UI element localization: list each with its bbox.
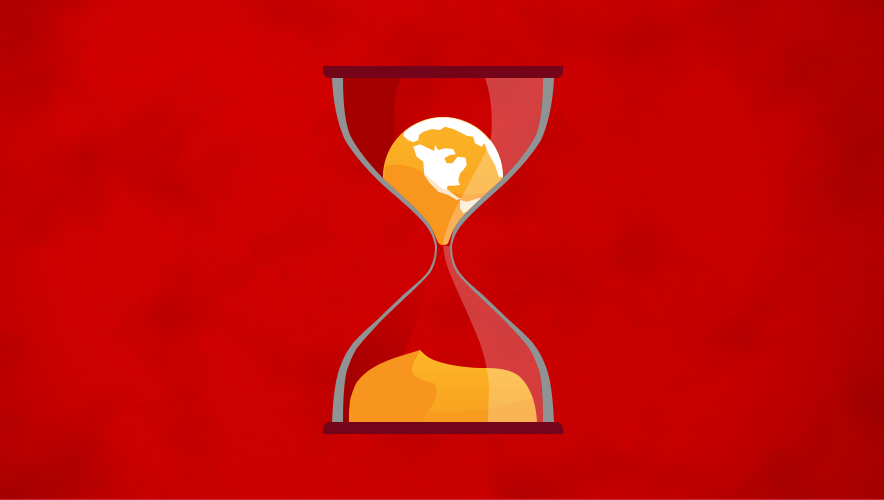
globe [383,115,505,250]
glass frame: upper left [332,78,437,246]
top cap [323,66,563,78]
Central America tint [424,174,462,200]
globe rim [384,117,490,177]
upper glass highlight [443,78,543,244]
sand shaded left part [349,350,437,422]
lower bulb shadow [343,282,423,422]
South America [460,198,482,214]
glass frame: lower right [450,246,554,423]
sand lower band [349,397,537,422]
lower glass highlight [443,246,543,422]
polar land [403,115,505,177]
hourglass [323,66,563,434]
sand pile [349,350,537,422]
North America [413,144,467,200]
glass frame: lower left [332,246,437,423]
upper bulb shadow [343,78,401,178]
globe shaded lower part [383,164,486,246]
bottom cap [323,422,563,434]
glass frame: upper right [450,78,554,246]
